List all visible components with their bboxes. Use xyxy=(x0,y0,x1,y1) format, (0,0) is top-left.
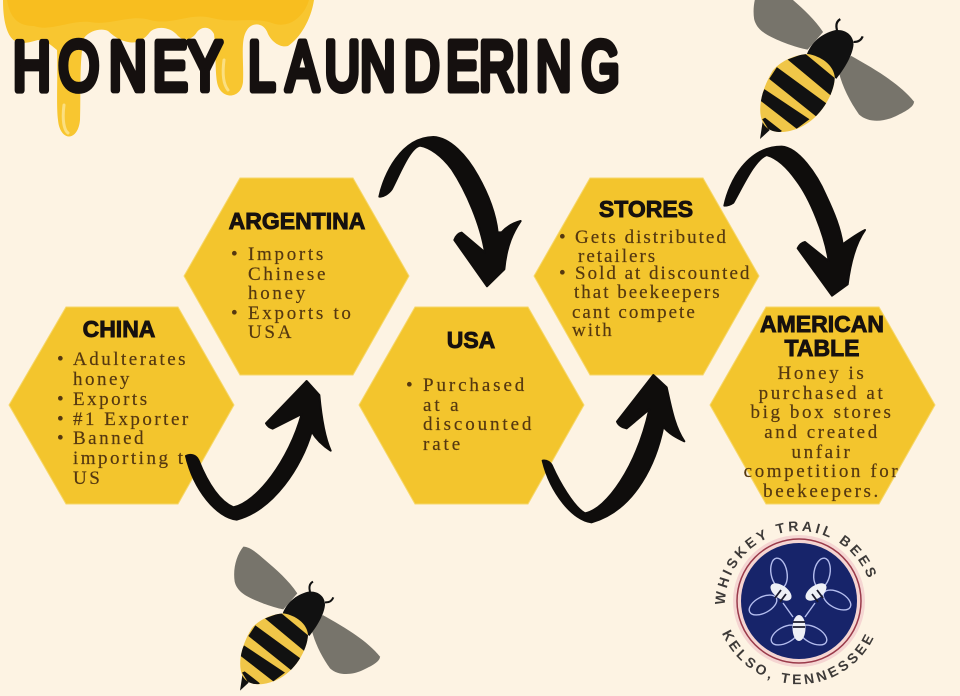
text: USA bullets: rate xyxy=(423,434,463,455)
text: USA bullets: discounted xyxy=(423,414,534,435)
arrow: USA to Stores xyxy=(543,375,684,522)
heading: Stores: STORES xyxy=(599,196,693,222)
bee: top right xyxy=(754,0,914,139)
text: USA bullets: Purchased xyxy=(423,375,527,396)
arrow: Argentina to USA xyxy=(379,137,521,286)
heading: Argentina: ARGENTINA xyxy=(229,208,365,234)
text: Argentina bullets: • xyxy=(231,244,240,265)
text: China bullets: Adulterates xyxy=(73,349,188,370)
text: China bullets: • xyxy=(57,428,66,449)
text: Argentina bullets: Chinese xyxy=(248,264,328,285)
title: HONEY xyxy=(13,28,223,106)
text: American Table body: beekeepers. xyxy=(763,481,881,502)
text: American Table body: unfair xyxy=(792,442,852,463)
text: American Table body: Honey is xyxy=(778,363,866,384)
text: USA bullets: at a xyxy=(423,395,462,416)
title: LAUNDERING xyxy=(248,26,620,105)
arrow: Stores to American Table xyxy=(724,147,865,296)
text: Stores bullets: Sold at discounted xyxy=(575,263,751,284)
text: China bullets: #1 Exporter xyxy=(73,409,191,430)
panel: Argentina xyxy=(184,178,409,375)
text: American Table body: and created xyxy=(764,422,880,443)
bee: bottom left xyxy=(234,547,380,691)
honey drip xyxy=(3,0,314,136)
text: China bullets: • xyxy=(57,389,66,410)
panel: USA xyxy=(359,307,584,504)
text: Argentina bullets: USA xyxy=(248,322,294,343)
text: Stores bullets: Gets distributed xyxy=(575,227,728,248)
text: American Table body: purchased at xyxy=(759,383,885,404)
text: American Table body: big box stores xyxy=(750,402,894,423)
text: Argentina bullets: Exports to xyxy=(248,303,354,324)
arrow: China to Argentina xyxy=(186,381,331,520)
text: China bullets: Exports xyxy=(73,389,150,410)
text: Stores bullets: • xyxy=(559,227,568,248)
text: USA bullets: • xyxy=(406,375,416,396)
text: China bullets: • xyxy=(57,349,66,370)
text: Stores bullets: cant compete xyxy=(572,302,697,323)
title xyxy=(13,26,620,106)
text: China bullets: • xyxy=(57,409,66,430)
text: Stores bullets: with xyxy=(572,320,614,341)
text: American Table body: competition for xyxy=(744,461,900,482)
text: Stores bullets: that beekeepers xyxy=(574,282,722,303)
logo text: WHISKEY TRAIL BEES xyxy=(714,522,876,604)
heading: American Table: AMERICAN xyxy=(760,311,884,337)
text: Argentina bullets: • xyxy=(231,303,240,324)
logo: Whiskey Trail Bees xyxy=(714,522,876,684)
text: Stores bullets: • xyxy=(559,263,568,284)
text: Argentina bullets: honey xyxy=(248,283,308,304)
panel: Stores xyxy=(534,178,759,375)
heading: USA: USA xyxy=(447,327,495,353)
logo location text: KELSO, TENNESSEE xyxy=(722,630,874,684)
text: Argentina bullets: Imports xyxy=(248,244,326,265)
text: China bullets: US xyxy=(73,468,102,489)
panel: China xyxy=(9,307,234,504)
text: Stores bullets: retailers xyxy=(578,246,657,267)
text: China bullets: honey xyxy=(73,369,132,390)
panel: American Table xyxy=(710,307,935,504)
icon: three bees xyxy=(746,557,854,649)
text: China bullets: importing to xyxy=(73,448,197,469)
heading: China: CHINA xyxy=(83,316,155,342)
text: China bullets: Banned xyxy=(73,428,146,449)
heading: American Table: TABLE xyxy=(785,335,859,361)
